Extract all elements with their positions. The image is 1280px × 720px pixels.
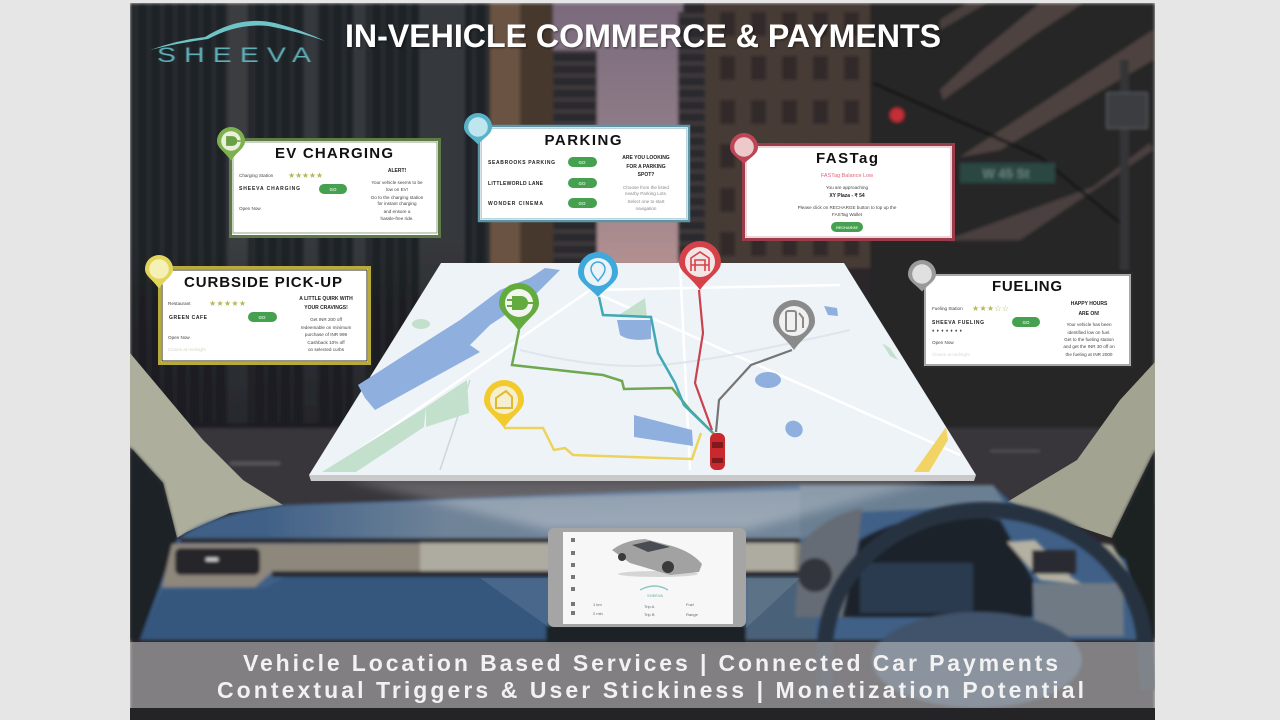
dial area [795,508,862,617]
parking prompt message: Select one to start [627,199,665,204]
curbside offer message: Cashback 10% off [307,340,345,345]
screen readouts: Fuel [686,602,694,607]
wheel hub [872,612,1082,708]
in-dash touchscreen [548,528,746,627]
parking locations list: WONDER CINEMA [488,201,543,207]
in-dash touchscreen: SHEEVA [647,593,663,598]
panel: parking [479,126,689,221]
map yellow road [914,427,948,472]
panel: curbside pick-up [160,268,370,364]
FASTag balance message: XY Plaza - ₹ 54 [829,193,865,199]
map parks [322,298,898,472]
EV station details [239,171,347,211]
FASTag balance message: You are approaching [826,185,869,190]
curbside offer message: purchase of INR 999 [305,332,348,337]
pin: EV charging [499,283,539,331]
curbside restaurant details: Restaurant [168,301,191,306]
heading: curbside pick-up: CURBSIDE PICK-UP [184,274,342,291]
left air vent [175,548,260,575]
EV alert message: Go to the charging station [371,195,424,200]
parking prompt message: ARE YOU LOOKING [622,155,670,161]
dashboard [130,447,1155,645]
fueling station details: GO [1022,320,1030,325]
curbside restaurant details: Closes at midnight [168,347,207,352]
steering wheel [825,510,1148,708]
fueling station details: Closes at midnight [932,352,971,357]
screen car image [612,539,702,577]
fueling offer message: Get to the fueling station [1064,337,1114,342]
footer line 1: Vehicle Location Based Services | Connected Car Payments [243,650,1058,676]
fueling offer message: Your vehicle has been [1066,322,1112,327]
pin: small fueling [908,260,936,292]
projection light beam [340,478,945,530]
screen readouts: 1 km [593,602,602,607]
curbside restaurant details: GO [258,315,266,320]
instrument hood [843,516,1033,617]
instrument cluster [860,563,973,613]
route: blue to parking [599,297,712,432]
fueling offer message: ARE ON! [1078,311,1100,317]
EV station details: GO [329,187,337,192]
fueling station details: ★★★☆☆ [972,304,1009,313]
parking locations list: GO [578,181,586,186]
EV alert message: ALERT! [388,168,406,174]
screen display [563,532,733,624]
route: gray to fueling [716,350,792,432]
heading: parking: PARKING [544,132,622,149]
FASTag balance message: FASTag Wallet [832,212,863,217]
EV station details: SHEEVA CHARGING [239,186,300,192]
parking locations list: SEABROOKS PARKING [488,160,555,166]
curbside restaurant details: Open Now [168,335,190,340]
panel: FASTag [744,144,954,240]
heading: fueling: FUELING [992,278,1062,295]
FASTag balance message: FASTag Balance Low [821,173,873,179]
parking prompt message: nearby Parking Lots. [625,191,667,196]
background: city street [130,3,1155,720]
FASTag balance message: RECHARGE [836,226,858,230]
EV alert message [371,168,424,221]
right air vent [1007,540,1083,584]
wheel rim [825,510,1148,700]
EV alert message: low on EV! [386,187,408,192]
parking locations list [488,157,597,208]
pin: curbside pick-up [484,380,524,428]
curbside restaurant details [168,299,277,352]
pin: small parking [464,113,492,144]
screen readouts: 2 min [593,611,603,616]
panel: EV charging [230,140,440,236]
parking prompt message: FOR A PARKING [626,164,666,170]
fueling station details [932,304,1040,357]
curbside offer message: redeemable on minimum [301,325,351,330]
right windscreen pillar [1007,362,1155,538]
logo: SHEEVA [150,21,325,67]
heading: FASTag: FASTag [816,150,878,167]
map roads [330,265,960,470]
screen readouts: Trip A [644,604,655,609]
fueling station details: SHEEVA FUELING [932,320,984,326]
EV station details: ★★★★★ [288,171,323,180]
title: IN-VEHICLE COMMERCE & PAYMENTS [345,18,941,54]
EV alert message: Your vehicle seems to be [371,180,423,185]
route: green to EV charging [512,330,714,434]
heading: EV charging: EV CHARGING [275,145,393,162]
curbside restaurant details: GREEN CAFE [169,315,208,321]
lower dash panel [1033,583,1124,636]
EV alert message: and ensure a [384,209,411,214]
FASTag balance message: Please click on RECHARGE button to top up the [798,205,897,210]
curbside restaurant details: ★★★★★ [209,299,246,308]
map water areas [358,268,838,446]
car marker [710,433,725,470]
screen readouts: Range [686,612,699,617]
pin: small curbside pick-up [145,255,173,289]
EV alert message: for instant charging [377,201,417,206]
screen readouts: Trip B [644,612,655,617]
screen readouts [593,604,698,617]
fueling offer message: the fueling at INR 2000 [1066,352,1113,357]
FASTag balance message [798,173,897,232]
footer band [130,642,1155,720]
parking locations list: GO [578,160,586,165]
curbside offer message: A LITTLE QUIRK WITH [299,296,353,302]
curbside offer message: on selected curbs [308,347,345,352]
EV alert message: hassle-free ride. [381,216,413,221]
parking prompt message: navigation [636,206,657,211]
holographic map [309,241,976,481]
fueling station details: Open Now [932,340,954,345]
pin: fueling [773,300,815,350]
parking locations list: LITTLEWORLD LANE [488,181,544,187]
footer line 2: Contextual Triggers & User Stickiness | Monetization Potential [217,677,1084,703]
EV station details: Charging Station [239,173,274,178]
fire escape bands [940,3,1083,100]
fueling offer message: HAPPY HOURS [1071,301,1108,307]
parking prompt message: SPOT? [638,172,654,178]
background: city street: W 45 St [983,166,1030,181]
parking locations list: GO [578,201,586,206]
screen logo [640,586,668,590]
map surface [309,263,976,475]
curbside offer message: YOUR CRAVINGS! [304,305,348,311]
pin: small EV charging [217,127,245,161]
pin: small FASTag [730,133,758,164]
fueling station details: ♦♦♦♦♦♦♦ [932,328,963,333]
fueling offer message: identified low on fuel. [1068,330,1110,335]
pin: parking [578,252,618,297]
curbside offer message: Get INR 200 off [310,317,343,322]
panel: fueling [923,273,1132,367]
pin: FASTag [679,241,721,290]
left windscreen pillar [130,353,283,538]
screen side glow right [746,578,800,628]
screen side glow left [480,578,550,628]
parking prompt message: Choose from the listed [623,185,669,190]
logo: SHEEVA: SHEEVA [157,43,311,67]
route: red to FASTag [695,290,712,430]
fueling offer message: and get the INR 30 off on [1063,344,1115,349]
screen sidebar icons [571,538,575,615]
infographic scene [130,3,1155,720]
EV station details: Open Now [239,206,261,211]
fueling offer message [1063,301,1115,357]
fueling station details: Fueling Station [932,306,963,311]
curbside offer message [299,296,353,352]
parking prompt message [622,155,670,211]
route: yellow to curbside [504,428,701,459]
